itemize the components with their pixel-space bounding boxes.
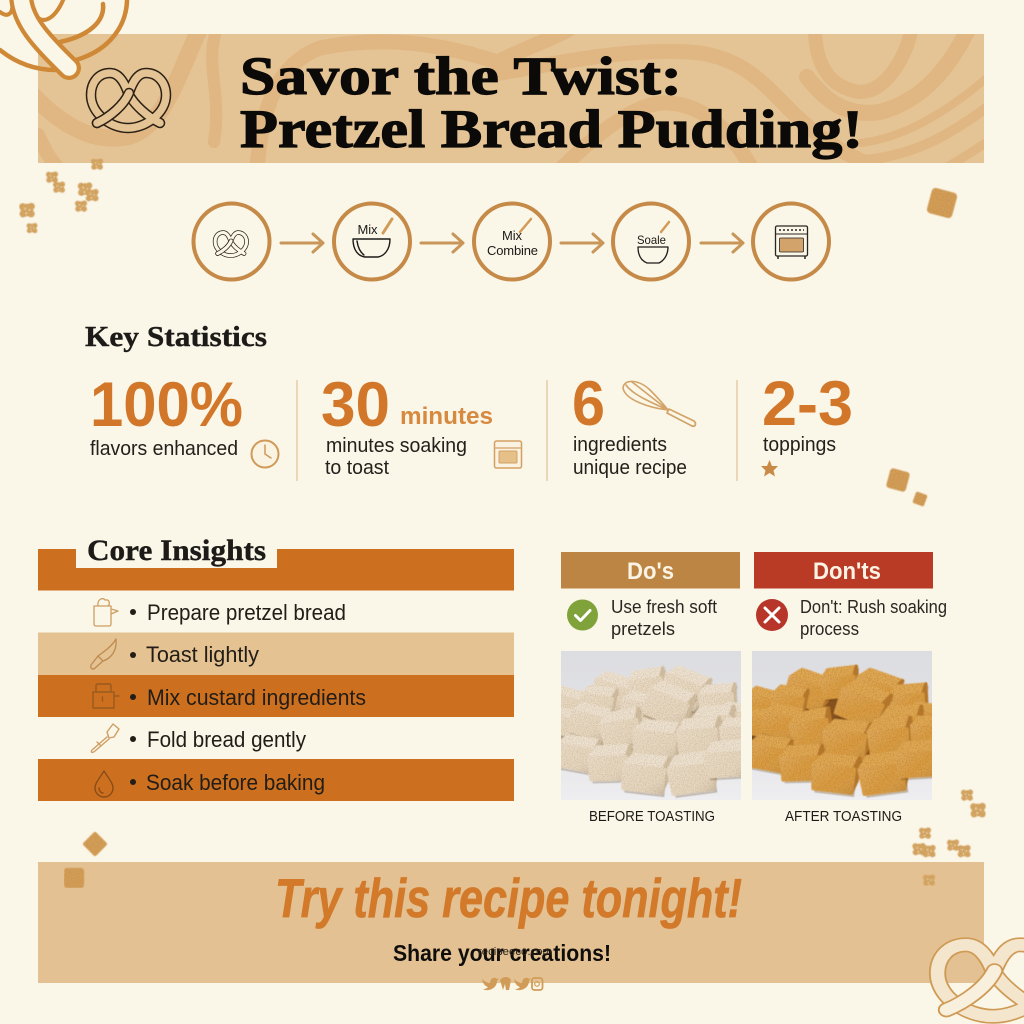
step 4: soak: [613, 204, 689, 280]
stat: 2-3 toppings: [761, 369, 853, 476]
photo: bread cubes after toasting: [752, 651, 932, 800]
panel: don'ts: Don'ts: [813, 558, 881, 585]
tip: do: Use fresh soft: [611, 597, 717, 617]
tip: don't: process: [800, 619, 859, 639]
stat: 6 ingredients: unique recipe: [573, 457, 687, 479]
decorative crumbs: [19, 158, 986, 886]
panel: don'ts: [754, 552, 947, 639]
stat: 30 minutes: to toast: [325, 457, 389, 479]
row: prepare pretzel bread: [94, 599, 346, 626]
row: fold bread gently: Fold bread gently: [147, 727, 306, 752]
title: Pretzel Bread Pudding!: [240, 99, 863, 159]
icon: cross: [756, 599, 788, 631]
row: mix custard ingredients: [38, 675, 514, 717]
header banner: [38, 34, 984, 163]
arrow 4: [701, 234, 743, 252]
icon: pretzel: [91, 73, 166, 128]
stat: 100%: [90, 370, 278, 468]
social icons: [482, 977, 542, 990]
stat: 30 minutes: 30: [321, 370, 390, 440]
row: mix custard ingredients: Mix custard ingredients: [147, 685, 366, 710]
arrow 3: [561, 234, 603, 252]
arrow 2: [421, 234, 463, 252]
step 5: oven: [753, 204, 829, 280]
heading: core insights: Core Insights: [87, 534, 266, 567]
stat: 2-3 toppings: 2-3: [762, 369, 853, 439]
tip: don't: [800, 597, 947, 639]
cta headline: Try this recipe tonight!: [275, 867, 742, 929]
step 3: combine: Combine: [487, 243, 538, 258]
tip: do: pretzels: [611, 619, 675, 639]
step 3: combine: Mix: [502, 228, 522, 243]
stat: 100%: 100%: [90, 370, 243, 440]
row: toast lightly: Toast lightly: [146, 642, 259, 667]
row: prepare pretzel bread: Prepare pretzel bread: [147, 600, 346, 625]
stat: 6 ingredients: 6: [572, 369, 605, 439]
decorative pretzel: top left corner: [0, 0, 127, 70]
step 2: mix: [334, 204, 410, 280]
decorative pretzel: bottom right corner: [938, 945, 1024, 1016]
step 4: soak: Soale: [637, 233, 666, 247]
panel: core insights: [38, 534, 514, 801]
stats row: [90, 369, 853, 481]
stat: 6 ingredients: ingredients: [573, 434, 667, 456]
caption: before: BEFORE TOASTING: [589, 809, 715, 825]
stat: 6 ingredients: [572, 369, 695, 479]
heading: key statistics: Key Statistics: [85, 321, 267, 353]
step 3: combine: [474, 204, 550, 280]
panel: do's: [561, 552, 740, 639]
step 1: pretzel: [194, 204, 270, 280]
stat: 30 minutes: [321, 370, 522, 479]
row: toast lightly: [38, 632, 514, 675]
cta subline: Share your creations!: [393, 940, 611, 966]
call to action banner: [38, 862, 984, 983]
icon: whisk: [623, 381, 695, 426]
overlapping small link text: recipeeco.com: [478, 946, 552, 958]
step 2: mix: Mix: [358, 222, 378, 237]
stat: 30 minutes: minutes soaking: [326, 435, 467, 457]
stat: 100%: flavors enhanced: [90, 438, 238, 460]
tip: don't: Don't: Rush soaking: [800, 597, 947, 617]
process flow: [194, 204, 829, 280]
row: soak before baking: Soak before baking: [146, 770, 325, 795]
photo: bread cubes before toasting: [561, 651, 741, 800]
title: [240, 46, 863, 159]
row: fold bread gently: [91, 724, 306, 752]
panel: do's: Do's: [627, 558, 674, 585]
decorative bread cubes: [64, 187, 958, 888]
arrow 1: [281, 234, 323, 252]
icon: check: [567, 600, 598, 630]
row: soak before baking: [38, 759, 514, 801]
tip: do: [611, 597, 717, 639]
title: Savor the Twist:: [240, 46, 682, 106]
stat: 2-3 toppings: toppings: [763, 434, 836, 456]
stat: 30 minutes: minutes: [400, 403, 493, 430]
caption: after: AFTER TOASTING: [785, 809, 902, 825]
